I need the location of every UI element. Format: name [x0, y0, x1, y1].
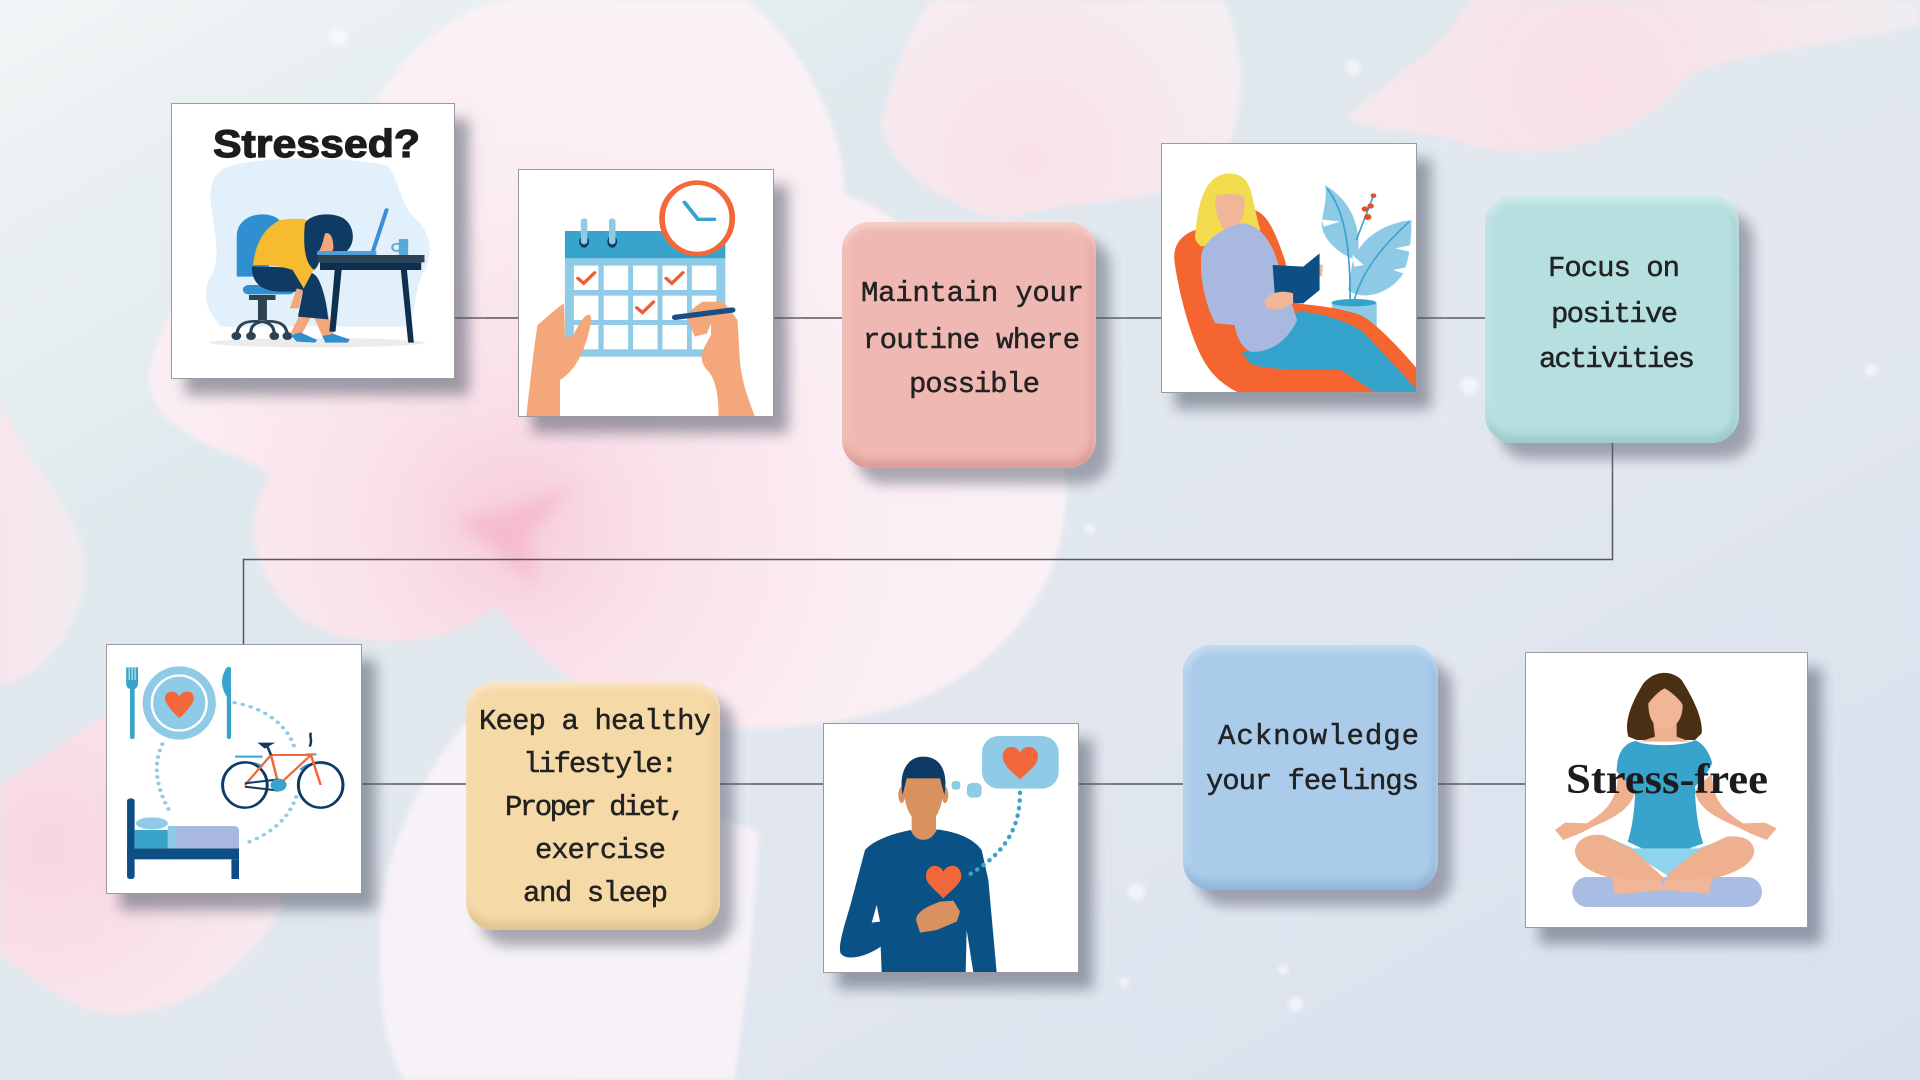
step text — [479, 705, 711, 910]
step box: Acknowledge your feelings — [1183, 645, 1438, 890]
icon: bicycle — [223, 733, 343, 808]
step text: Keep a healthy — [479, 705, 711, 738]
step text: routine where — [863, 324, 1080, 357]
card: Stressed? person slumped at desk — [171, 103, 455, 379]
step box: Focus on positive activities — [1485, 196, 1739, 443]
step text: Maintain your — [861, 277, 1084, 310]
step text: Proper diet, — [505, 791, 686, 824]
step text — [1539, 252, 1695, 376]
step text: lifestyle: — [523, 748, 678, 781]
illustration: diet, exercise and sleep cycle — [126, 666, 343, 879]
step text: possible — [909, 368, 1040, 401]
step box: Keep a healthy lifestyle — [466, 682, 720, 930]
illustration: meditating woman — [1555, 673, 1777, 907]
step box: Maintain your routine where possible — [842, 222, 1096, 468]
step text: positive — [1551, 298, 1678, 331]
step text: your feelings — [1206, 765, 1419, 798]
illustration: reading woman and plant — [1174, 173, 1417, 392]
step text: Focus on — [1548, 252, 1680, 285]
step text — [861, 277, 1084, 401]
step text: and sleep — [523, 877, 668, 910]
card: Stress-free woman meditating — [1525, 652, 1808, 928]
step text — [1206, 720, 1419, 798]
illustration: man feeling his heart — [840, 736, 1059, 972]
step text: activities — [1539, 343, 1695, 376]
step text: exercise — [535, 834, 666, 867]
card: plate, bicycle and bed — [106, 644, 362, 894]
card: man with hand on heart — [823, 723, 1079, 973]
card: woman reading in a chair — [1161, 143, 1417, 393]
illustration: hands marking a calendar — [526, 183, 755, 417]
card: calendar and clock — [518, 169, 774, 417]
step text: Acknowledge — [1218, 720, 1419, 753]
illustration: stressed worker — [206, 158, 430, 347]
heading: Stressed?: Stressed? — [213, 123, 420, 166]
heading: Stress-free: Stress-free — [1566, 757, 1768, 803]
